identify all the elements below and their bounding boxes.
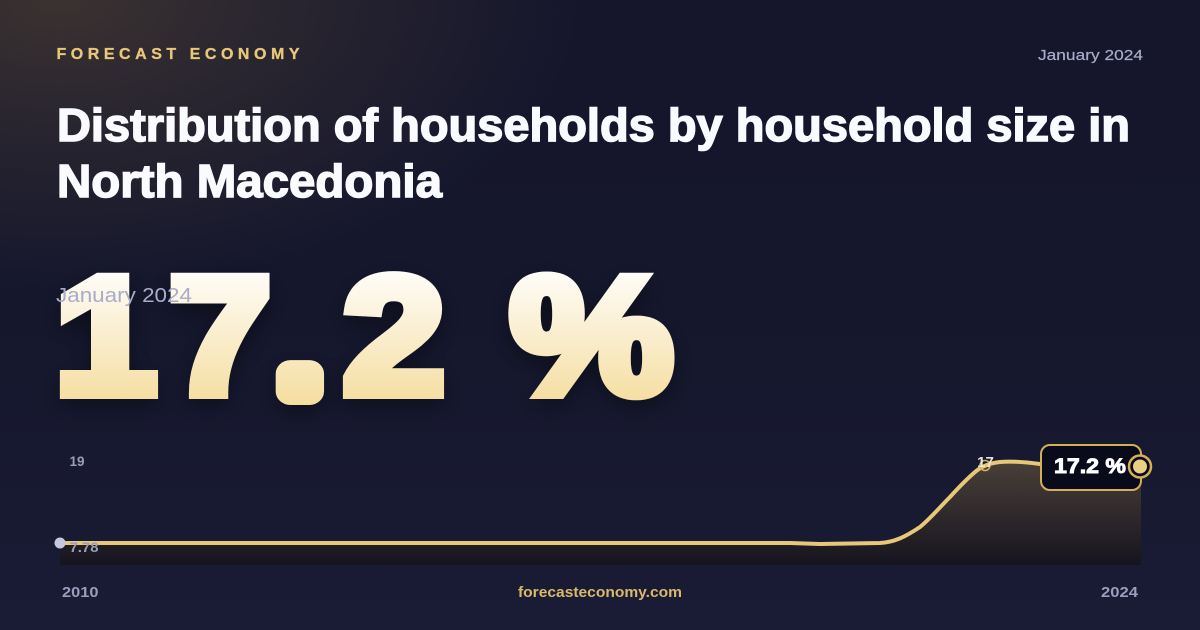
value callout xyxy=(1041,445,1141,490)
big value: 7 xyxy=(169,243,271,428)
y-axis max label: 19 xyxy=(70,454,85,469)
big value xyxy=(55,243,673,428)
x-axis start label: 2010 xyxy=(62,584,98,601)
peak marker xyxy=(980,460,990,470)
date overlay: January 2024 xyxy=(56,285,192,307)
x-axis end label: 2024 xyxy=(1101,584,1139,601)
big value: 2 xyxy=(343,243,445,428)
big value: % xyxy=(510,243,673,428)
y-axis min label: 7.78 xyxy=(70,539,99,555)
chart line xyxy=(60,462,1140,544)
big value: . xyxy=(282,283,318,417)
chart area fill xyxy=(60,462,1141,565)
title: Distribution of households by household size in xyxy=(57,99,1130,151)
brand label: FORECAST ECONOMY xyxy=(56,46,300,63)
line chart xyxy=(54,445,1151,565)
end marker xyxy=(1129,456,1151,478)
peak label: 17 xyxy=(977,454,994,471)
big value: 1 xyxy=(55,243,157,428)
title: North Macedonia xyxy=(57,155,442,207)
website: forecasteconomy.com xyxy=(518,584,682,601)
title xyxy=(57,99,1130,207)
date top right: January 2024 xyxy=(1038,47,1143,64)
start dot xyxy=(54,538,66,548)
value callout: 17.2 % xyxy=(1054,455,1126,478)
